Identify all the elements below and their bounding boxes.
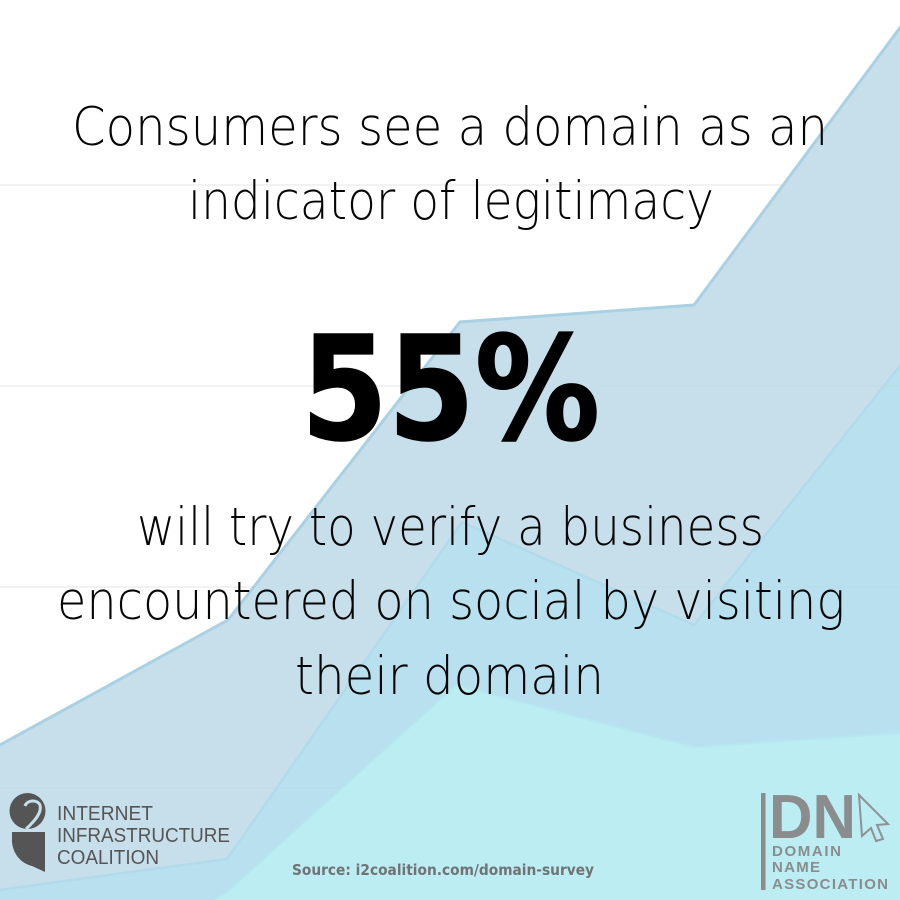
logo: Domain Name Association: ASSOCIATION — [772, 876, 888, 893]
description text — [57, 497, 845, 707]
description text: will try to verify a business — [137, 497, 764, 558]
logo: Internet Infrastructure Coalition — [10, 793, 230, 872]
area chart: middle series — [0, 363, 900, 900]
heading: Consumers see a domain as an — [72, 97, 828, 158]
icon: pixel cursor — [859, 795, 888, 841]
big statistic: 55% — [301, 305, 600, 473]
heading: indicator of legitimacy — [188, 171, 714, 232]
logo: Internet Infrastructure Coalition: COALITION — [57, 847, 159, 869]
description text: their domain — [295, 646, 604, 707]
source: Source: i2coalition.com/domain-survey — [292, 861, 594, 879]
logo: Domain Name Association: NAME — [772, 859, 820, 876]
logo: Domain Name Association — [761, 783, 888, 893]
logo: Internet Infrastructure Coalition: INFRASTRUCTURE — [57, 825, 230, 847]
logo: Internet Infrastructure Coalition: INTERNET — [57, 803, 153, 825]
heading — [72, 97, 828, 232]
logo: Domain Name Association: DOMAIN — [772, 843, 841, 860]
logo: Domain Name Association: DN — [769, 783, 856, 852]
icon: i2 mark — [10, 793, 46, 872]
area chart: front series — [213, 685, 900, 900]
